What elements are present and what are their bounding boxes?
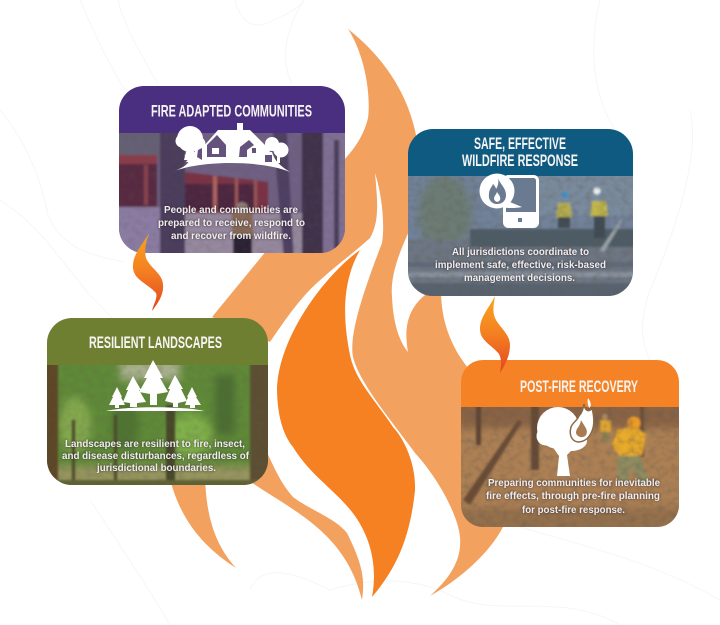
- body text: All jurisdictions coordinate to: [452, 247, 589, 258]
- heading: POST-FIRE RECOVERY: [520, 378, 638, 396]
- photo: green pine forest: [47, 365, 268, 485]
- icon: house with trees on a hill: [172, 123, 290, 172]
- body text: and disease disturbances, regardless of: [62, 451, 250, 462]
- body text: fire effects, through pre-fire planning: [486, 491, 660, 502]
- body text: [486, 478, 660, 516]
- body text: implement safe, effective, risk-based: [435, 260, 606, 271]
- flame: lower centre light tongue: [245, 450, 363, 600]
- heading: RESILIENT LANDSCAPES: [89, 334, 222, 352]
- card: Post-Fire Recovery: [455, 360, 685, 535]
- header band purple: [119, 86, 345, 133]
- body text: Preparing communities for inevitable: [488, 478, 660, 489]
- heading: WILDFIRE RESPONSE: [462, 152, 578, 170]
- heading: [462, 135, 578, 170]
- body text: Landscapes are resilient to fire, insect,: [65, 439, 245, 450]
- body text: for post-fire response.: [522, 505, 625, 516]
- icon: row of pine trees: [106, 360, 204, 411]
- icon: phone with flame speech bubble: [480, 174, 538, 227]
- header band teal blue: [408, 129, 633, 176]
- body text: [435, 247, 606, 284]
- body text: and recover from wildfire.: [171, 231, 291, 242]
- heading: SAFE, EFFECTIVE: [474, 135, 566, 153]
- body text: prepared to receive, respond to: [158, 218, 305, 229]
- header band olive green: [47, 318, 268, 365]
- photo: cabin in snowy forest: [119, 133, 345, 253]
- card: Fire Adapted Communities: [119, 86, 345, 253]
- flame: large light orange back flame: [212, 29, 510, 596]
- body text: People and communities are: [164, 205, 298, 216]
- body text: management decisions.: [464, 273, 575, 284]
- photo: burned forest floor with crew: [461, 407, 679, 527]
- flame: small connector between blue and orange cards: [480, 296, 510, 373]
- card: Resilient Landscapes: [47, 318, 268, 485]
- body text: [158, 205, 305, 242]
- flame: central dark orange flame: [277, 250, 415, 597]
- flame: small connector between purple and green cards: [133, 232, 163, 311]
- body text: [62, 439, 250, 474]
- flame: lower left light tongue: [168, 470, 236, 568]
- icon: tree with flame: [536, 398, 594, 476]
- photo: crew in burned brush: [408, 176, 633, 296]
- card: Safe, Effective Wildfire Response: [408, 129, 633, 296]
- heading: FIRE ADAPTED COMMUNITIES: [151, 102, 312, 120]
- header band orange: [461, 360, 679, 407]
- body text: jurisdictional boundaries.: [96, 463, 216, 474]
